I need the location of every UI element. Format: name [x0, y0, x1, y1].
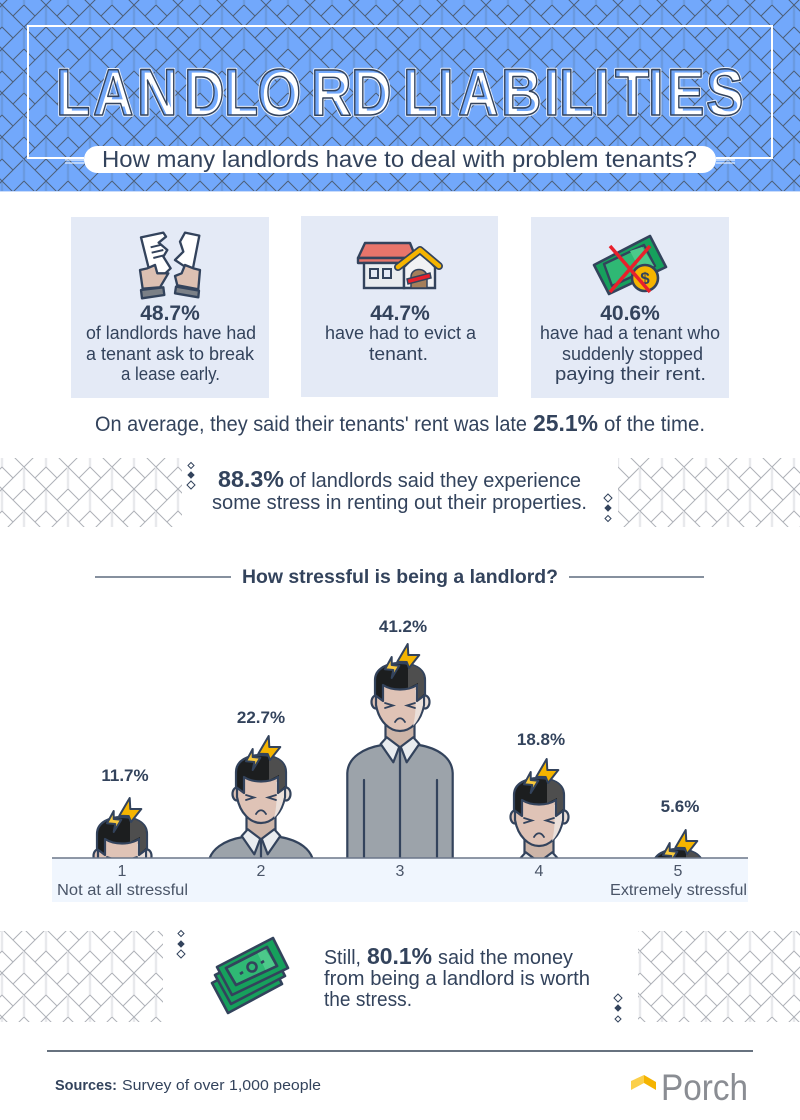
text: eviction: tenant.	[369, 344, 428, 364]
values: 22.7%	[237, 708, 285, 727]
icon: stack of cash	[212, 938, 288, 1013]
diamonds: money right	[614, 994, 622, 1022]
figure 1	[92, 797, 153, 858]
footer rule	[47, 1050, 753, 1052]
baseline	[52, 857, 748, 859]
text: eviction: have had to evict a	[325, 323, 477, 343]
text: average late rent: of the time.	[604, 413, 705, 436]
figure 5	[654, 829, 702, 858]
panel: break lease	[71, 217, 269, 398]
text: average late rent	[95, 410, 705, 436]
text: stress callout	[212, 466, 587, 514]
text: stopped paying: suddenly stopped	[562, 344, 703, 364]
text: break lease	[86, 323, 256, 384]
axis labels: 4	[535, 863, 544, 880]
text: stopped paying: have had a tenant who	[540, 323, 720, 343]
chart heading: How stressful is being a landlord?	[242, 567, 558, 588]
axis labels: 1	[118, 863, 127, 880]
text: money worth the stress: the stress.	[324, 989, 412, 1011]
axis labels: 2	[257, 863, 266, 880]
text: average late rent: 25.1%	[533, 410, 598, 436]
text: break lease: a lease early.	[121, 364, 220, 384]
icon: houses	[358, 243, 439, 288]
sources: Sources:	[55, 1077, 117, 1094]
logo: Porch	[631, 1067, 748, 1108]
title: LANDLORD LIABILITIES	[60, 59, 747, 132]
text: average late rent: On average, they said their tenants' rent was late	[95, 413, 527, 436]
axis labels: Extremely stressful	[610, 882, 747, 899]
axis labels	[57, 863, 747, 899]
stat: 48.7%: 48.7%	[140, 302, 200, 325]
values: 11.7%	[101, 766, 149, 785]
icon: torn lease	[140, 233, 200, 298]
title: LANDLORD LIABILITIES	[56, 56, 743, 129]
text: money worth the stress	[324, 943, 590, 1011]
values: 5.6%	[661, 797, 699, 816]
stat: 44.7%: 44.7%	[370, 302, 430, 325]
stat: 40.6%: 40.6%	[600, 302, 660, 325]
axis labels: 3	[396, 863, 405, 880]
text: money worth the stress: from being a landlord is worth	[324, 968, 590, 990]
text: money worth the stress: 80.1%	[367, 943, 432, 969]
text: break lease: a tenant ask to break	[86, 344, 255, 364]
text: stopped paying	[540, 323, 720, 384]
diamonds: stress right	[604, 494, 612, 522]
diamonds: money left	[177, 930, 185, 958]
pattern bands: stress	[0, 458, 800, 527]
text: eviction	[325, 323, 477, 364]
panel: stopped paying	[531, 217, 729, 398]
text: money worth the stress: said the money	[438, 947, 573, 969]
chart: stress level pictogram	[52, 620, 748, 902]
subtitle pill: How many landlords have to deal with problem tenants?	[102, 146, 697, 172]
text: stopped paying: paying their rent.	[555, 364, 706, 384]
axis labels: 5	[674, 863, 683, 880]
text: stress callout: 88.3%	[218, 466, 284, 492]
title: LANDLORD LIABILITIES	[56, 56, 743, 129]
text: stress callout: some stress in renting out their properties.	[212, 492, 587, 514]
panel: eviction	[301, 216, 498, 397]
title	[58, 67, 743, 118]
figure 3	[347, 644, 453, 870]
sources: Survey of over 1,000 people	[122, 1077, 321, 1094]
values: 18.8%	[517, 730, 565, 749]
text: stress callout: of landlords said they experience	[289, 470, 581, 492]
axis labels: Not at all stressful	[57, 882, 188, 899]
text: break lease: of landlords have had	[86, 323, 256, 343]
values	[101, 617, 699, 816]
text: money worth the stress: Still,	[324, 947, 361, 969]
header banner	[0, 0, 800, 203]
figure 2	[208, 735, 314, 858]
diamonds: stress left	[187, 462, 195, 489]
axis band	[52, 858, 748, 902]
values: 41.2%	[379, 617, 427, 636]
pattern bands: money	[0, 931, 800, 1022]
header frame	[28, 26, 772, 158]
figure 4	[509, 758, 570, 858]
logo: Porch: Porch	[661, 1067, 748, 1108]
icon: crossed out cash	[594, 236, 666, 294]
icon: crossed out cash: $	[640, 269, 650, 288]
